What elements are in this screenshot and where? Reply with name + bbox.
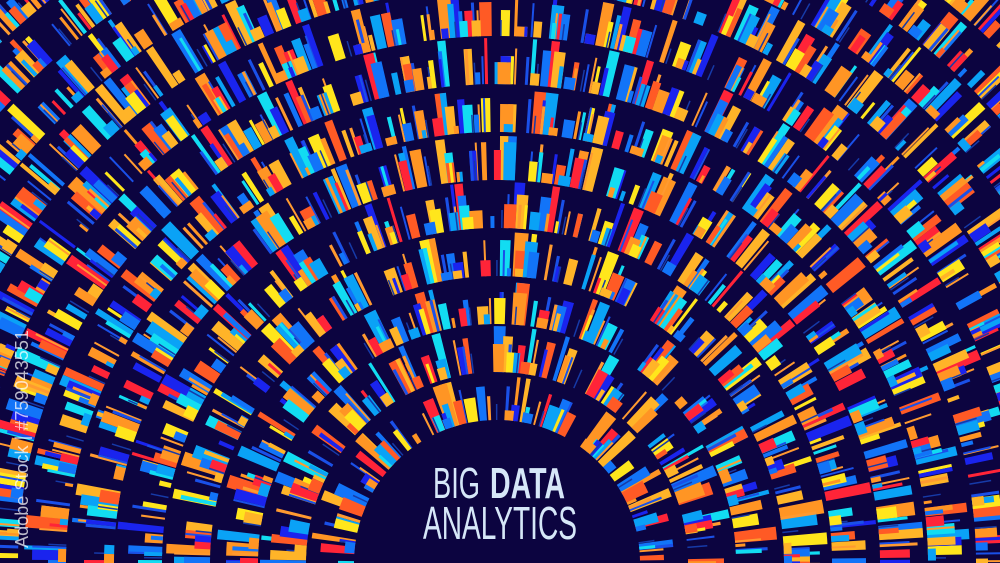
ring 6 bars	[92, 158, 902, 563]
ring 5 bars	[139, 205, 855, 563]
ring 7 bars	[45, 111, 949, 563]
ring 2 bars	[283, 349, 711, 563]
title: ANALYTICS	[423, 497, 577, 549]
title: DATA	[490, 459, 565, 508]
title	[423, 459, 577, 549]
ring 4 bars	[188, 254, 806, 563]
ring 1 bars	[332, 398, 662, 563]
stock watermark: Adobe Stock | #759043551	[12, 330, 32, 548]
title: BIG	[433, 459, 480, 508]
ring 3 bars	[237, 303, 757, 563]
